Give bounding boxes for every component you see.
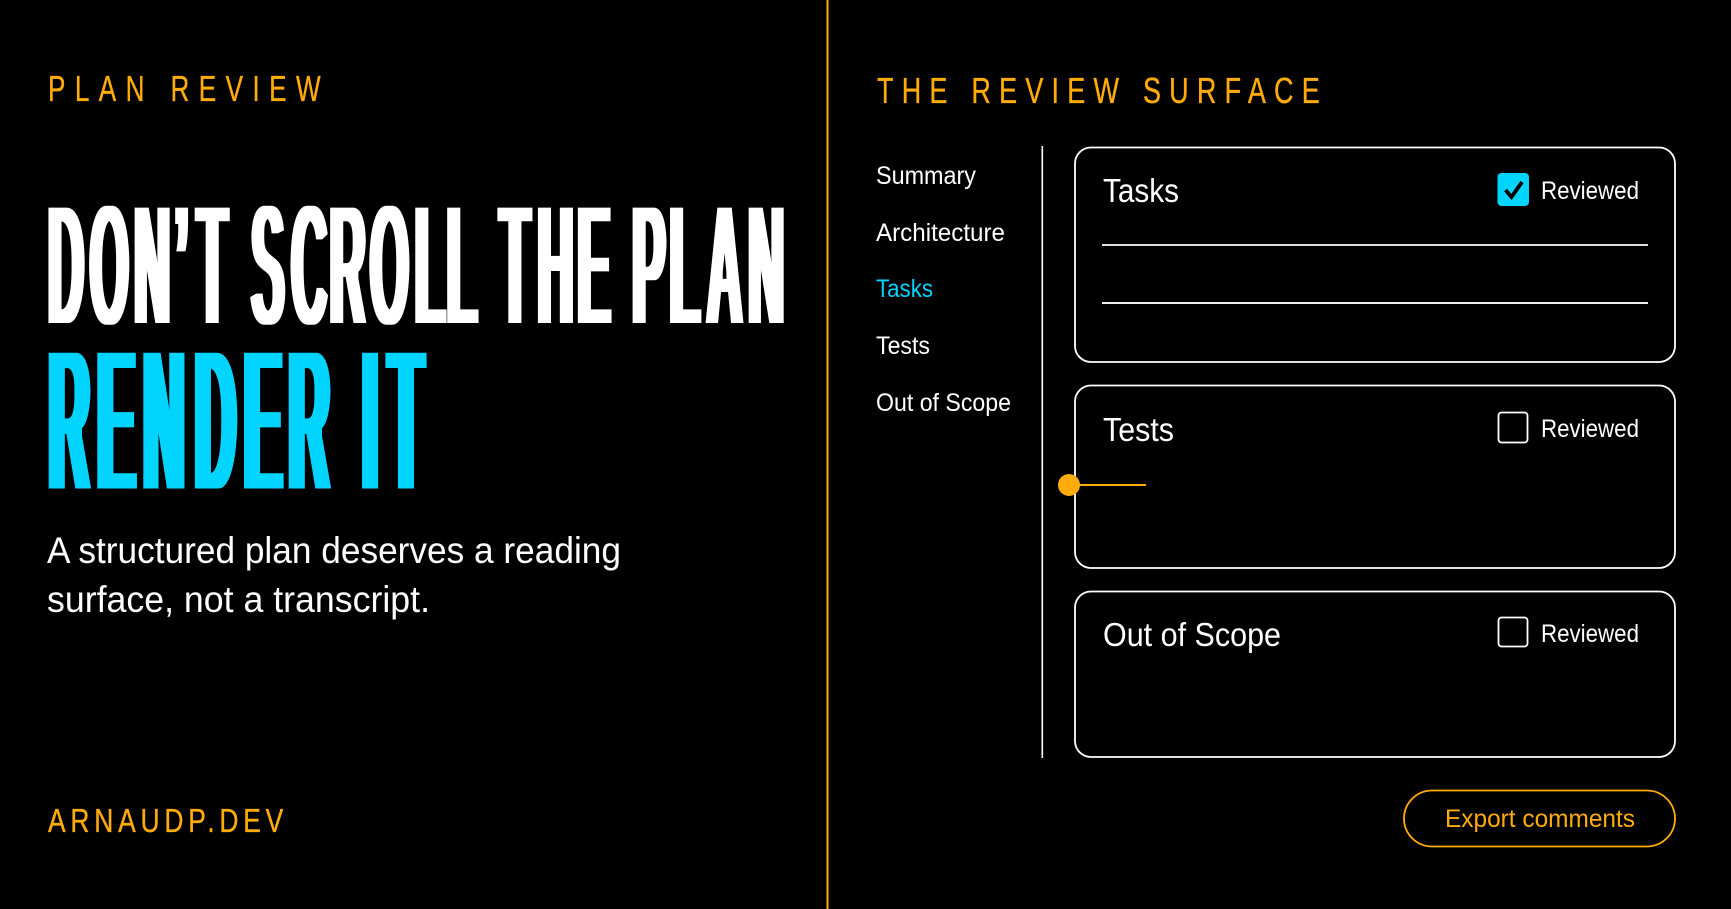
eyebrow: plan review: PLAN REVIEW	[48, 68, 330, 109]
button: export comments	[1404, 790, 1675, 846]
sidebar navigation: Tasks	[876, 275, 933, 303]
sidebar navigation: Tests	[876, 332, 930, 360]
card: tests	[1058, 386, 1675, 568]
sidebar navigation	[876, 162, 1011, 417]
sidebar separator line	[1042, 146, 1043, 758]
sidebar navigation: Summary	[876, 162, 976, 190]
subtitle text	[47, 530, 621, 620]
comment marker	[1058, 474, 1146, 496]
card: out of scope	[1075, 592, 1675, 757]
card: tests: Reviewed	[1541, 415, 1639, 443]
icon: empty checkbox	[1498, 618, 1528, 646]
icon: empty checkbox	[1498, 412, 1528, 442]
footer: site url: ARNAUDP.DEV	[48, 802, 288, 839]
subtitle text: surface, not a transcript.	[47, 579, 430, 620]
sidebar navigation: Out of Scope	[876, 389, 1011, 417]
vertical divider between panels	[826, 0, 828, 909]
panel: review surface	[876, 70, 1675, 846]
heading line: render it: RENDER IT	[49, 304, 423, 538]
card: tests: Tests	[1103, 411, 1174, 448]
card: tasks	[1075, 148, 1675, 362]
heading line: don't scroll the plan: DON’T SCROLL THE PLAN	[48, 168, 784, 364]
card: out of scope: Out of Scope	[1103, 616, 1281, 653]
icon: checked checkbox	[1498, 173, 1529, 206]
sidebar navigation: Architecture	[876, 219, 1005, 247]
card: tasks: Reviewed	[1541, 177, 1639, 205]
button: export comments: Export comments	[1445, 805, 1635, 833]
subtitle text: A structured plan deserves a reading	[47, 530, 621, 571]
card: tasks: Tasks	[1103, 172, 1179, 209]
panel: left hero	[47, 68, 784, 839]
card: out of scope: Reviewed	[1541, 620, 1639, 648]
section heading: THE REVIEW SURFACE	[877, 70, 1328, 111]
